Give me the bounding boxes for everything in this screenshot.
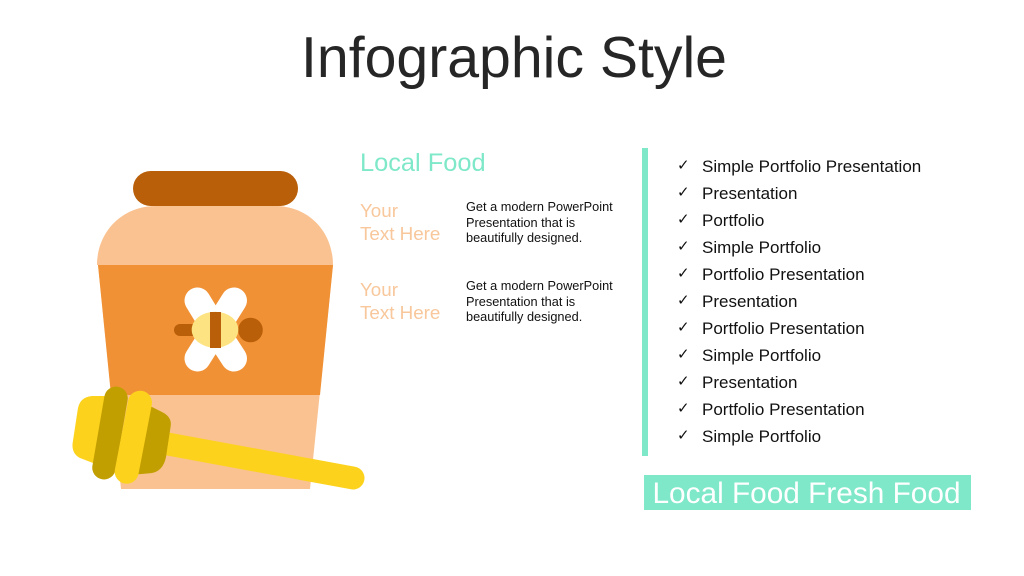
checklist: Portfolio: [702, 211, 764, 230]
checklist: ✓: [677, 264, 690, 282]
label: Your Text Here 2: Text Here: [360, 302, 440, 323]
icon: honey jar with bee and dipper: [72, 171, 364, 490]
jar lid: [133, 171, 298, 206]
title: Infographic Style: [301, 26, 727, 90]
checklist: ✓: [677, 183, 690, 201]
label: Your Text Here 1: Text Here: [360, 223, 440, 244]
description 2: beautifully designed.: [466, 309, 582, 324]
vertical accent bar: [642, 148, 648, 456]
jar label band: [98, 265, 333, 395]
checklist: Portfolio Presentation: [702, 319, 865, 338]
checklist: [677, 156, 921, 446]
banner: Local Food Fresh Food: Local Food Fresh Food: [652, 477, 961, 510]
label: Your Text Here 1: [360, 200, 440, 244]
checklist: Presentation: [702, 292, 797, 311]
description 2: [466, 278, 613, 324]
description 1: beautifully designed.: [466, 230, 582, 245]
checklist: ✓: [677, 318, 690, 336]
checklist: ✓: [677, 210, 690, 228]
checklist: Portfolio Presentation: [702, 400, 865, 419]
checklist: Presentation: [702, 373, 797, 392]
jar body: [97, 206, 333, 489]
icon: bee: [174, 300, 263, 358]
label: Your Text Here 2: [360, 279, 440, 323]
checklist: ✓: [677, 237, 690, 255]
checklist: Portfolio Presentation: [702, 265, 865, 284]
label: Your Text Here 1: Your: [360, 200, 398, 221]
label: Your Text Here 2: Your: [360, 279, 398, 300]
description 1: Get a modern PowerPoint: [466, 199, 613, 214]
checklist: ✓: [677, 399, 690, 417]
description 1: [466, 199, 613, 245]
description 1: Presentation that is: [466, 214, 575, 230]
checklist: Simple Portfolio: [702, 346, 821, 365]
checklist: Simple Portfolio Presentation: [702, 157, 921, 176]
heading: Local Food: Local Food: [360, 149, 486, 177]
checklist: ✓: [677, 345, 690, 363]
icon: honey dipper: [72, 396, 353, 478]
checklist: ✓: [677, 372, 690, 390]
checklist: ✓: [677, 291, 690, 309]
checklist: ✓: [677, 156, 690, 174]
description 2: Get a modern PowerPoint: [466, 278, 613, 293]
checklist: Presentation: [702, 184, 797, 203]
description 2: Presentation that is: [466, 294, 575, 308]
checklist: Simple Portfolio: [702, 238, 821, 257]
checklist: ✓: [677, 426, 690, 444]
checklist: Simple Portfolio: [702, 427, 821, 446]
